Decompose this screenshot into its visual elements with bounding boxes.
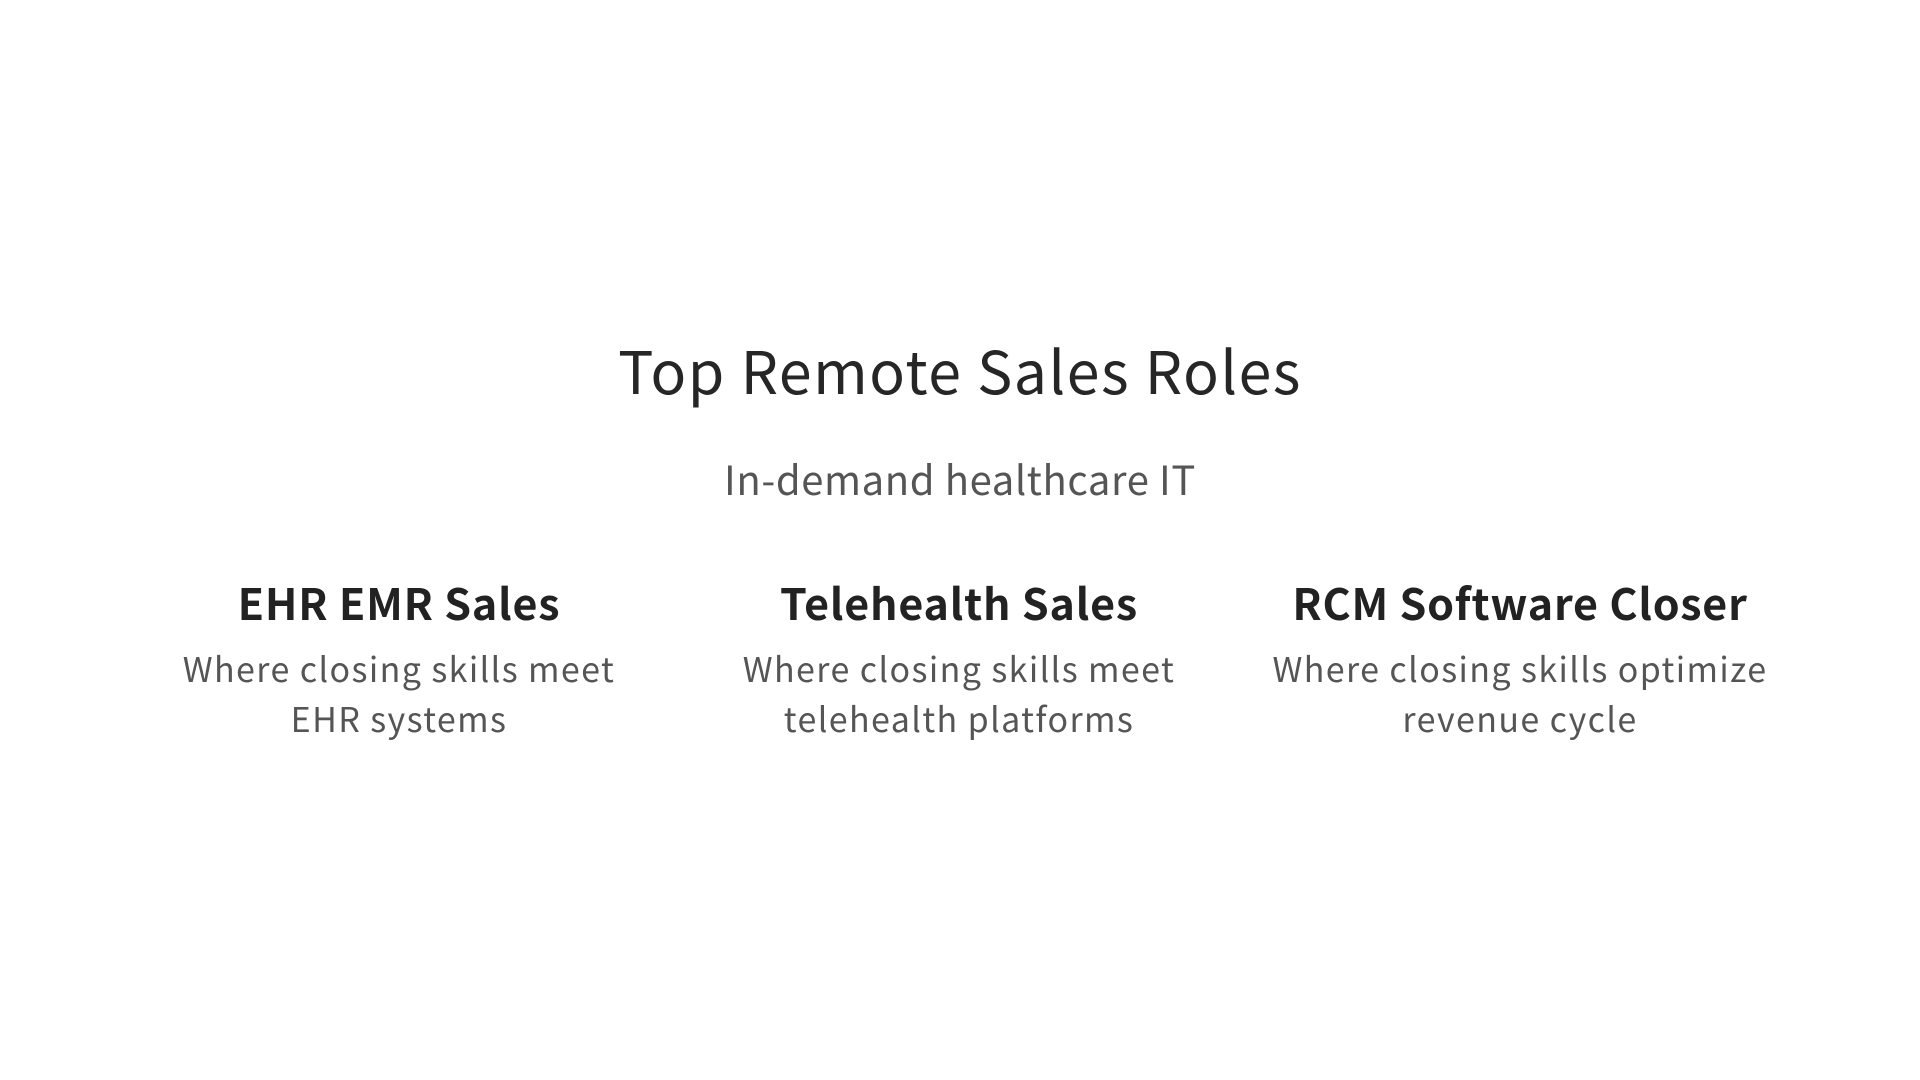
- heading: RCM Software Closer: RCM Software Closer: [1292, 571, 1748, 633]
- panel: RCM Software Closer: [1272, 571, 1768, 742]
- subtitle: In-demand healthcare IT: [724, 449, 1196, 507]
- text: Telehealth description: telehealth platforms: [784, 693, 1134, 742]
- text: RCM description: [1272, 643, 1768, 742]
- heading: EHR EMR Sales: EHR EMR Sales: [238, 571, 560, 633]
- text: EHR description: EHR systems: [291, 693, 507, 742]
- text: Telehealth description: [743, 643, 1175, 742]
- text: EHR description: [183, 643, 615, 742]
- text: EHR description: Where closing skills meet: [183, 643, 615, 692]
- panel: Telehealth Sales: [743, 571, 1175, 742]
- text: Telehealth description: Where closing skills meet: [743, 643, 1175, 692]
- text: RCM description: revenue cycle: [1402, 693, 1638, 742]
- title: Top Remote Sales Roles: [618, 326, 1302, 411]
- heading: Telehealth Sales: Telehealth Sales: [780, 571, 1138, 633]
- panel: EHR EMR Sales: [183, 571, 615, 742]
- text: RCM description: Where closing skills optimize: [1272, 643, 1768, 692]
